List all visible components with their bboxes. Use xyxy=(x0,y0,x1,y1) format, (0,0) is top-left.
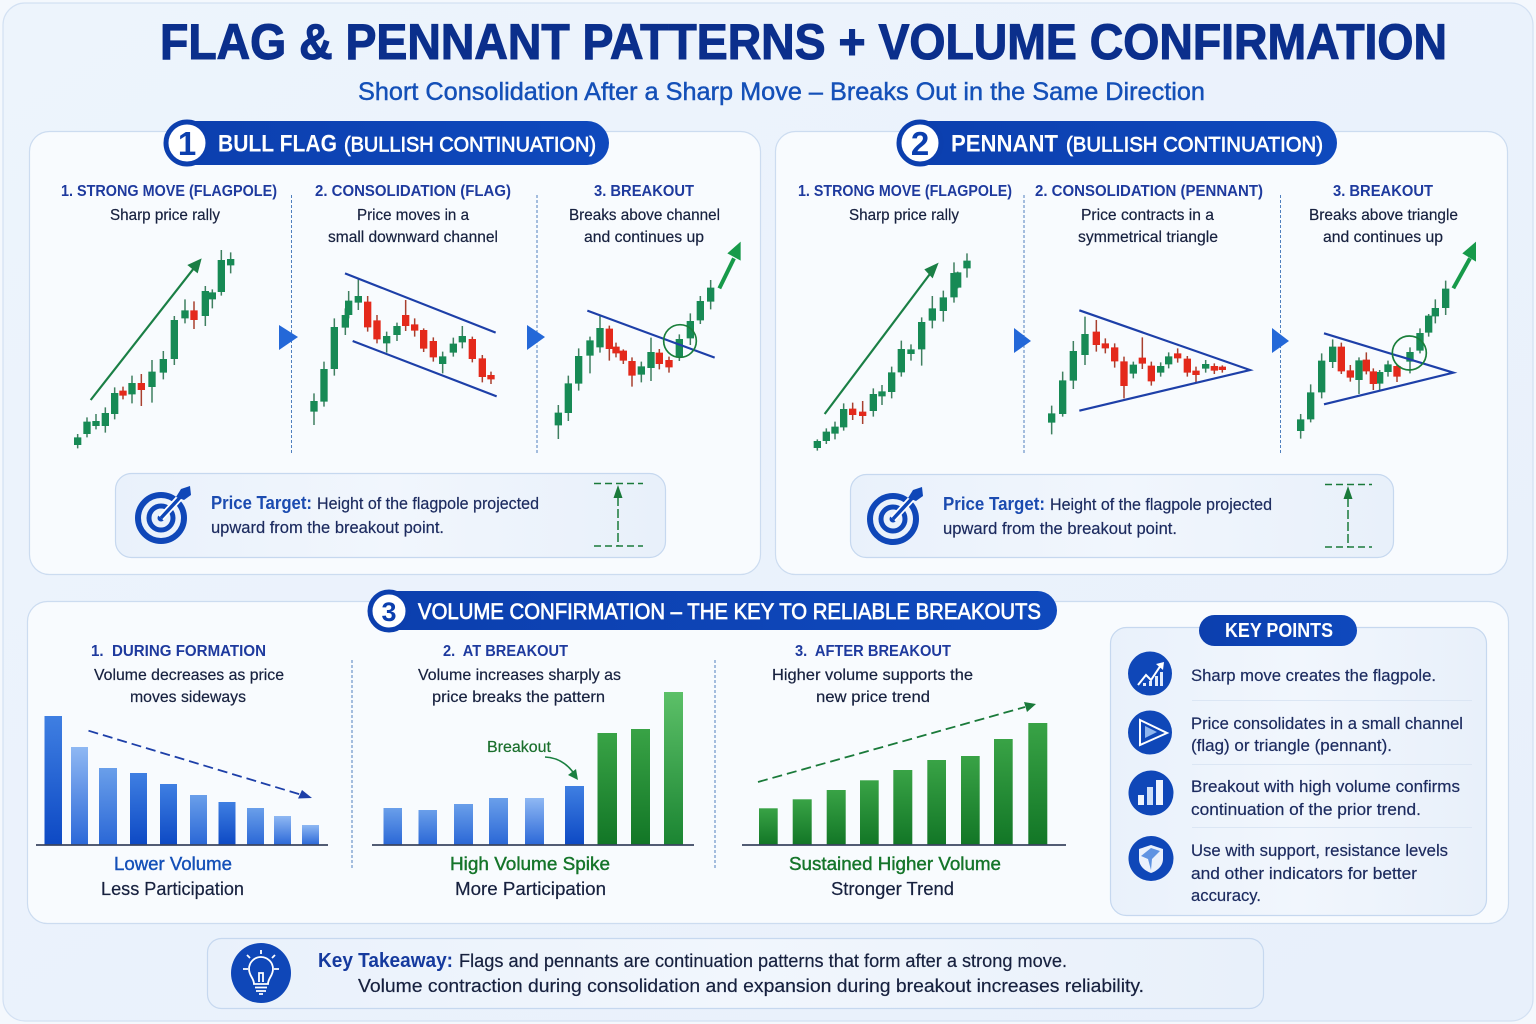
icon: bar chart xyxy=(1128,770,1174,816)
header: volume pill: 3 xyxy=(381,597,397,627)
column 1 text: during formation: 1. DURING FORMATION xyxy=(91,643,266,660)
column 1 text: during formation: Volume decreases as price xyxy=(94,667,284,684)
label: lower volume xyxy=(101,854,244,899)
step 3 text: breakout: and continues up xyxy=(1323,229,1443,246)
step 2 text: consolidation: Price moves in a xyxy=(357,207,469,224)
callout: key takeaway xyxy=(208,938,1264,1008)
text: key point 4: and other indicators for better xyxy=(1191,865,1418,883)
step 3 text: breakout: 3. BREAKOUT xyxy=(1333,183,1433,200)
header: volume pill xyxy=(370,591,1057,630)
text: key point 2 xyxy=(1191,715,1463,755)
callout: price target xyxy=(850,474,1394,558)
callout: price target: Price Target: xyxy=(211,493,312,513)
step 2 text: consolidation xyxy=(1035,183,1263,246)
text: key point 1: Sharp move creates the flagpole. xyxy=(1191,667,1436,685)
callout: price target: Height of the flagpole projected xyxy=(317,495,539,513)
label: lower volume: Less Participation xyxy=(101,879,244,899)
callout: key takeaway: Volume contraction during consolidation and expansion during breakout increases reliability. xyxy=(358,976,1144,996)
panel: bull flag xyxy=(30,121,760,574)
text: key point 3: Breakout with high volume confirms xyxy=(1191,778,1460,796)
header: bull flag pill xyxy=(166,121,609,165)
chart: pennant flagpole rally xyxy=(817,253,967,451)
icon: projected height arrow xyxy=(1325,484,1372,547)
header: bull flag pill: (BULLISH CONTINUATION) xyxy=(344,134,596,156)
callout: price target: Price Target: xyxy=(943,494,1045,514)
icon: shield xyxy=(1128,836,1174,881)
title: FLAG & PENNANT PATTERNS + VOLUME CONFIRMATION xyxy=(160,14,1447,70)
arrow: step 2 to 3 xyxy=(1272,328,1289,353)
label: sustained higher volume: Sustained Higher Volume xyxy=(789,854,1001,874)
arrow: step 2 to 3 xyxy=(527,325,545,350)
step 1 text: strong move: Sharp price rally xyxy=(849,207,959,224)
step 1 text: strong move: Sharp price rally xyxy=(110,207,220,224)
heading: key points xyxy=(1199,615,1357,646)
step 3 text: breakout xyxy=(1309,183,1458,246)
chart: flag channel xyxy=(314,273,497,425)
text: key point 2: (flag) or triangle (pennant). xyxy=(1191,737,1392,755)
callout: price target: upward from the breakout point. xyxy=(211,519,444,537)
text: key point 3: continuation of the prior trend. xyxy=(1191,801,1421,819)
panel: key points xyxy=(1110,615,1486,916)
label: breakout: Breakout xyxy=(487,739,552,756)
step 2 text: consolidation: small downward channel xyxy=(328,229,498,246)
step 3 text: breakout: 3. BREAKOUT xyxy=(594,183,694,200)
icon: rising chart xyxy=(1128,652,1172,696)
label: high volume spike xyxy=(450,854,610,899)
arrow: step 1 to 2 xyxy=(1014,328,1031,353)
label: lower volume: Lower Volume xyxy=(114,854,232,874)
column 3 text: after breakout xyxy=(772,643,973,706)
step 1 text: strong move: 1. STRONG MOVE (FLAGPOLE) xyxy=(61,183,277,200)
header: pennant pill: 2 xyxy=(911,125,929,162)
step 3 text: breakout: Breaks above channel xyxy=(569,207,720,224)
step 2 text: consolidation: 2. CONSOLIDATION (PENNANT) xyxy=(1035,183,1263,200)
header: pennant pill: (BULLISH CONTINUATION) xyxy=(1066,134,1323,156)
bar chart: lower volume xyxy=(36,716,328,845)
step 2 text: consolidation: 2. CONSOLIDATION (FLAG) xyxy=(315,183,511,200)
step 1 text: strong move: 1. STRONG MOVE (FLAGPOLE) xyxy=(798,183,1012,200)
step 1 text: strong move xyxy=(61,183,277,224)
chart: flagpole rally xyxy=(78,250,231,448)
text: key point 4: accuracy. xyxy=(1191,887,1261,905)
icon: pennant xyxy=(1128,710,1172,754)
header: volume pill: VOLUME CONFIRMATION – THE KEY TO RELIABLE BREAKOUTS xyxy=(418,599,1041,624)
column 1 text: during formation: moves sideways xyxy=(130,689,246,706)
step 3 text: breakout: Breaks above triangle xyxy=(1309,207,1458,224)
step 2 text: consolidation: Price contracts in a xyxy=(1081,207,1214,224)
column 3 text: after breakout: new price trend xyxy=(816,689,930,706)
label: high volume spike: More Participation xyxy=(455,879,606,899)
step 2 text: consolidation: symmetrical triangle xyxy=(1078,229,1218,246)
header: bull flag pill: BULL FLAG xyxy=(218,130,337,158)
column 2 text: at breakout: 2. AT BREAKOUT xyxy=(443,643,568,660)
text: key point 4: Use with support, resistance levels xyxy=(1191,842,1448,860)
callout: key takeaway: Key Takeaway: xyxy=(318,950,453,972)
chart: pennant triangle xyxy=(1052,310,1250,434)
bar chart: sustained higher volume xyxy=(742,702,1066,845)
chart: flag breakout xyxy=(558,242,741,439)
arrow: step 1 to 2 xyxy=(279,325,298,350)
step 2 text: consolidation xyxy=(315,183,511,246)
callout: price target: Height of the flagpole projected xyxy=(1050,496,1272,514)
icon: target xyxy=(138,486,191,541)
label: sustained higher volume xyxy=(789,854,1001,899)
callout: price target: upward from the breakout point. xyxy=(943,520,1177,538)
header: bull flag pill: 1 xyxy=(178,125,196,162)
icon: light bulb xyxy=(231,943,291,1003)
step 3 text: breakout xyxy=(569,183,720,246)
chart: pennant breakout xyxy=(1301,242,1476,439)
callout: key takeaway: Flags and pennants are continuation patterns that form after a strong move. xyxy=(459,951,1067,971)
header: pennant pill: PENNANT xyxy=(951,130,1058,158)
label: high volume spike: High Volume Spike xyxy=(450,854,610,874)
column 3 text: after breakout: Higher volume supports the xyxy=(772,667,973,684)
column 1 text: during formation xyxy=(91,643,284,706)
callout: price target xyxy=(116,474,666,558)
column 2 text: at breakout: Volume increases sharply as xyxy=(418,667,621,684)
icon: target xyxy=(870,487,923,542)
text: key point 2: Price consolidates in a small channel xyxy=(1191,715,1463,733)
label: sustained higher volume: Stronger Trend xyxy=(831,879,954,899)
icon: projected height arrow xyxy=(594,484,643,546)
bar chart: high volume spike xyxy=(372,692,694,845)
step 3 text: breakout: and continues up xyxy=(584,229,704,246)
header: pennant pill xyxy=(899,121,1337,165)
column 2 text: at breakout: price breaks the pattern xyxy=(432,689,605,706)
heading: key points: KEY POINTS xyxy=(1225,620,1333,642)
text: key point 4 xyxy=(1191,842,1448,905)
panel: pennant xyxy=(776,121,1508,574)
column 2 text: at breakout xyxy=(418,643,621,706)
panel: volume confirmation xyxy=(28,591,1508,924)
text: key point 3 xyxy=(1191,778,1460,819)
subtitle: Short Consolidation After a Sharp Move – Breaks Out in the Same Direction xyxy=(358,78,1205,106)
step 1 text: strong move xyxy=(798,183,1012,224)
column 3 text: after breakout: 3. AFTER BREAKOUT xyxy=(795,643,951,660)
